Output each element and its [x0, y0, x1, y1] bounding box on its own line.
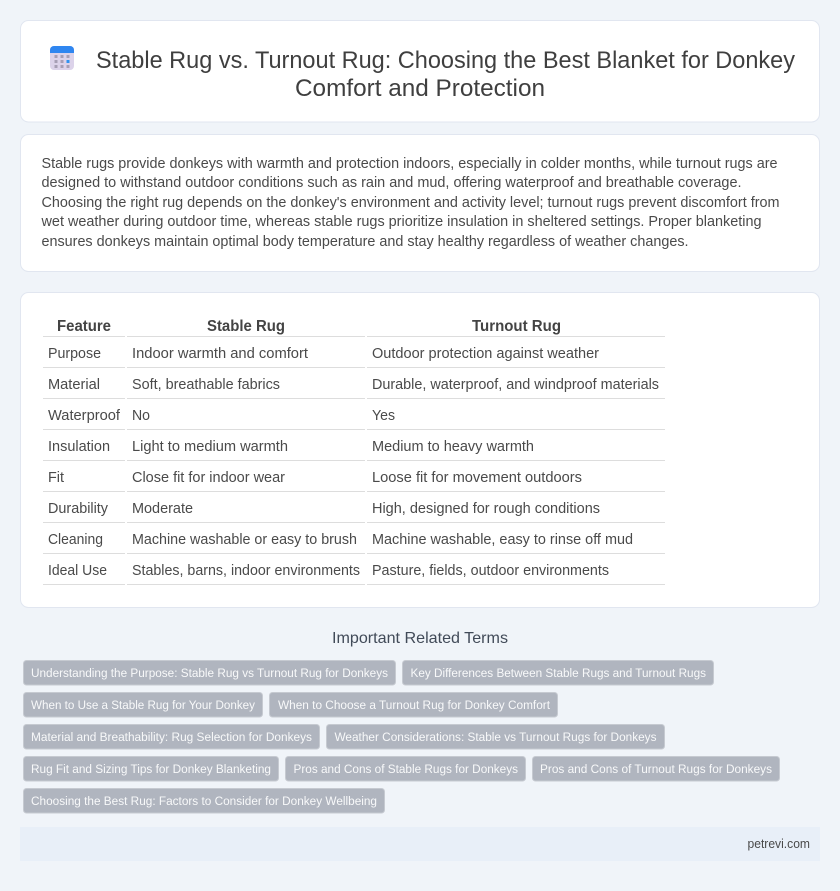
table row: material: Soft, breathable fabrics — [132, 377, 280, 393]
table row: ideal use: Pasture, fields, outdoor environments — [372, 563, 609, 579]
tag — [270, 692, 558, 717]
table row: ideal use: Stables, barns, indoor environments — [132, 563, 360, 579]
table row: ideal use: Ideal Use — [48, 563, 107, 579]
tag — [532, 756, 780, 781]
tag — [326, 724, 664, 749]
table row: durability — [48, 501, 600, 517]
table header: Stable Rug — [207, 318, 285, 335]
tag: Weather Considerations: Stable vs Turnout Rugs for Donkeys — [334, 730, 656, 744]
table row: cleaning: Machine washable, easy to rinse off mud — [372, 532, 633, 548]
related terms tags — [24, 660, 780, 813]
title text — [96, 47, 795, 102]
table row: material: Material — [48, 377, 100, 393]
table row: insulation — [48, 439, 534, 455]
table row: purpose — [48, 346, 599, 362]
panel: title — [20, 20, 820, 122]
tag: Pros and Cons of Turnout Rugs for Donkeys — [540, 762, 772, 776]
table row: material: Durable, waterproof, and windproof materials — [372, 377, 659, 393]
table row: purpose: Purpose — [48, 346, 101, 362]
tag — [24, 660, 396, 685]
panel: introduction text: Stable rugs provide donkeys with warmth and protection indoors, especially in colder months, while turnout rugs are — [42, 156, 778, 172]
heading: important related terms: Important Related Terms — [332, 630, 508, 647]
tag: Key Differences Between Stable Rugs and Turnout Rugs — [410, 666, 706, 680]
table row: insulation: Medium to heavy warmth — [372, 439, 534, 455]
table row: insulation: Insulation — [48, 439, 110, 455]
tag — [24, 756, 278, 781]
table header — [57, 318, 561, 335]
tag — [24, 692, 262, 717]
table row: material — [48, 377, 659, 393]
tag: Rug Fit and Sizing Tips for Donkey Blanketing — [31, 762, 271, 776]
tag — [24, 724, 320, 749]
title text: Comfort and Protection — [295, 75, 545, 102]
panel: comparison table — [20, 292, 820, 608]
table row: fit: Loose fit for movement outdoors — [372, 470, 582, 486]
table row: ideal use — [48, 563, 609, 579]
table row: durability: Moderate — [132, 501, 193, 517]
tag: Pros and Cons of Stable Rugs for Donkeys — [294, 762, 518, 776]
footer — [20, 827, 820, 861]
table row: purpose: Outdoor protection against weather — [372, 346, 599, 362]
footer: petrevi.com — [748, 837, 810, 851]
table row: fit: Close fit for indoor wear — [132, 470, 285, 486]
table row: fit — [48, 470, 582, 486]
tag: When to Use a Stable Rug for Your Donkey — [31, 698, 256, 712]
tag — [24, 788, 384, 813]
table row: waterproof: No — [132, 408, 150, 424]
tag — [402, 660, 714, 685]
panel: introduction text: Choosing the right rug depends on the donkey's environment and activity level; turnout rugs prevent discomfort from — [42, 195, 780, 211]
table row: fit: Fit — [48, 470, 64, 486]
title text: Stable Rug vs. Turnout Rug: Choosing the Best Blanket for Donkey — [96, 47, 795, 74]
tag: When to Choose a Turnout Rug for Donkey Comfort — [278, 698, 551, 712]
table row: durability: Durability — [48, 501, 109, 517]
table header: Feature — [57, 318, 111, 335]
table row: waterproof: Waterproof — [48, 408, 121, 424]
panel: introduction text: designed to withstand outdoor conditions such as rain and mud, offering waterproof and breathable coverage. — [42, 175, 742, 191]
panel: introduction text: wet weather during outdoor time, whereas stable rugs prioritize insulation in sheltered settings. Proper blanketing — [40, 214, 761, 230]
panel: introduction text — [20, 134, 820, 272]
tag: Understanding the Purpose: Stable Rug vs Turnout Rug for Donkeys — [31, 666, 388, 680]
tag — [286, 756, 526, 781]
table row: durability: High, designed for rough conditions — [372, 501, 600, 517]
table row: insulation: Light to medium warmth — [132, 439, 288, 455]
table row: waterproof — [48, 408, 395, 424]
table row: waterproof: Yes — [372, 408, 395, 424]
tag: Choosing the Best Rug: Factors to Consider for Donkey Wellbeing — [31, 794, 377, 808]
table row: cleaning — [48, 532, 633, 548]
table row: cleaning: Cleaning — [48, 532, 103, 548]
tag: Material and Breathability: Rug Selection for Donkeys — [31, 730, 312, 744]
table row: purpose: Indoor warmth and comfort — [132, 346, 308, 362]
panel: introduction text: ensures donkeys maintain optimal body temperature and stay healthy regardless of weather changes. — [42, 234, 688, 250]
table header: Turnout Rug — [472, 318, 561, 335]
table row: cleaning: Machine washable or easy to brush — [132, 532, 357, 548]
icon: calendar — [50, 46, 74, 70]
